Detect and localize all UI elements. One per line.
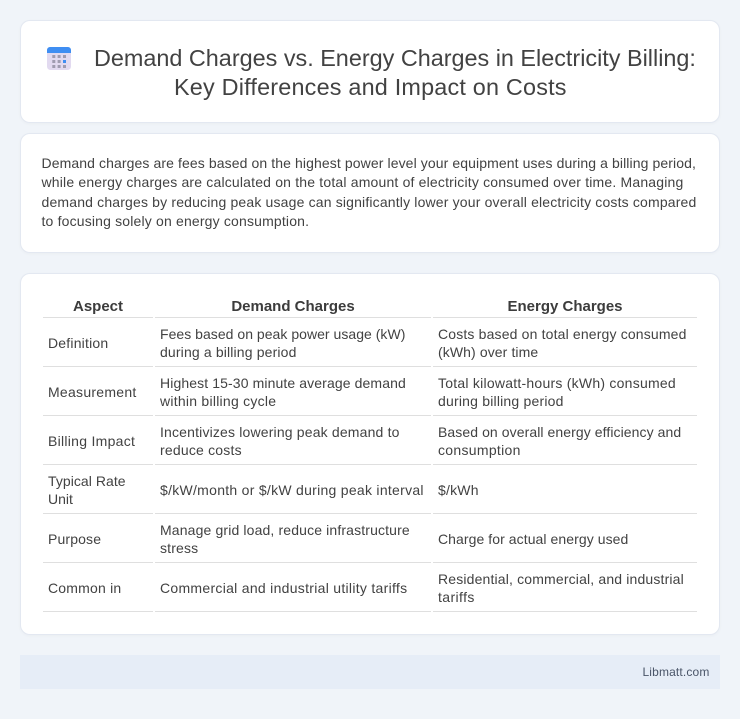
- row: definition: [43, 326, 697, 367]
- intro paragraph: to focusing solely on energy consumption.: [42, 213, 309, 229]
- footer source: Libmatt.com: [642, 665, 710, 679]
- intro paragraph: [42, 155, 696, 229]
- row: billing impact: Incentivizes lowering peak demand to: [160, 424, 400, 440]
- row: typical rate unit: Unit: [48, 491, 73, 507]
- row: billing impact: Based on overall energy efficiency and: [438, 424, 681, 440]
- title: Demand Charges vs. Energy Charges in Electricity Billing:: [94, 45, 696, 71]
- row: typical rate unit: $/kWh: [438, 482, 479, 498]
- row: typical rate unit: $/kW/month or $/kW during peak interval: [160, 482, 424, 498]
- row: purpose: Purpose: [48, 531, 101, 547]
- row: typical rate unit: Typical Rate: [48, 473, 126, 489]
- row: purpose: stress: [160, 540, 198, 556]
- row: billing impact: consumption: [438, 442, 521, 458]
- row: measurement: Measurement: [48, 384, 137, 400]
- row: purpose: Charge for actual energy used: [438, 531, 628, 547]
- header row: [43, 298, 697, 318]
- header row: Energy Charges: [507, 298, 623, 315]
- row: definition: Fees based on peak power usage (kW): [160, 326, 405, 342]
- row: billing impact: Billing Impact: [48, 433, 135, 449]
- row: measurement: Highest 15-30 minute average demand: [160, 375, 406, 391]
- row: definition: Definition: [48, 335, 108, 351]
- row: purpose: Manage grid load, reduce infrastructure: [160, 522, 410, 538]
- title: Key Differences and Impact on Costs: [174, 74, 567, 100]
- title: [94, 45, 696, 100]
- row: measurement: [43, 375, 697, 416]
- intro paragraph: Demand charges are fees based on the highest power level your equipment uses during a billing period,: [42, 155, 696, 171]
- row: definition: during a billing period: [160, 344, 297, 360]
- row: common in: Common in: [48, 580, 121, 596]
- row: common in: Commercial and industrial utility tariffs: [160, 580, 407, 596]
- comparison table panel: [20, 273, 720, 635]
- row: common in: Residential, commercial, and industrial: [438, 571, 684, 587]
- row: measurement: during billing period: [438, 393, 564, 409]
- row: measurement: Total kilowatt-hours (kWh) consumed: [438, 375, 676, 391]
- row: definition: (kWh) over time: [438, 344, 538, 360]
- row: billing impact: reduce costs: [160, 442, 242, 458]
- intro paragraph: while energy charges are calculated on the total amount of electricity consumed over time. Managing: [42, 174, 683, 190]
- row: common in: tariffs: [438, 589, 475, 605]
- row: typical rate unit: [43, 473, 697, 514]
- row: common in: [43, 571, 697, 612]
- row: billing impact: [43, 424, 697, 465]
- row: purpose: [43, 522, 697, 563]
- header row: Aspect: [73, 298, 123, 315]
- intro paragraph: demand charges by reducing peak usage can significantly lower your overall electricity costs compared: [42, 194, 696, 210]
- intro text panel: [20, 133, 720, 253]
- footer bar: [20, 655, 720, 689]
- header row: Demand Charges: [231, 298, 355, 315]
- icon: calendar: [47, 47, 71, 70]
- title card: [20, 20, 720, 123]
- row: definition: Costs based on total energy consumed: [438, 326, 687, 342]
- row: measurement: within billing cycle: [160, 393, 276, 409]
